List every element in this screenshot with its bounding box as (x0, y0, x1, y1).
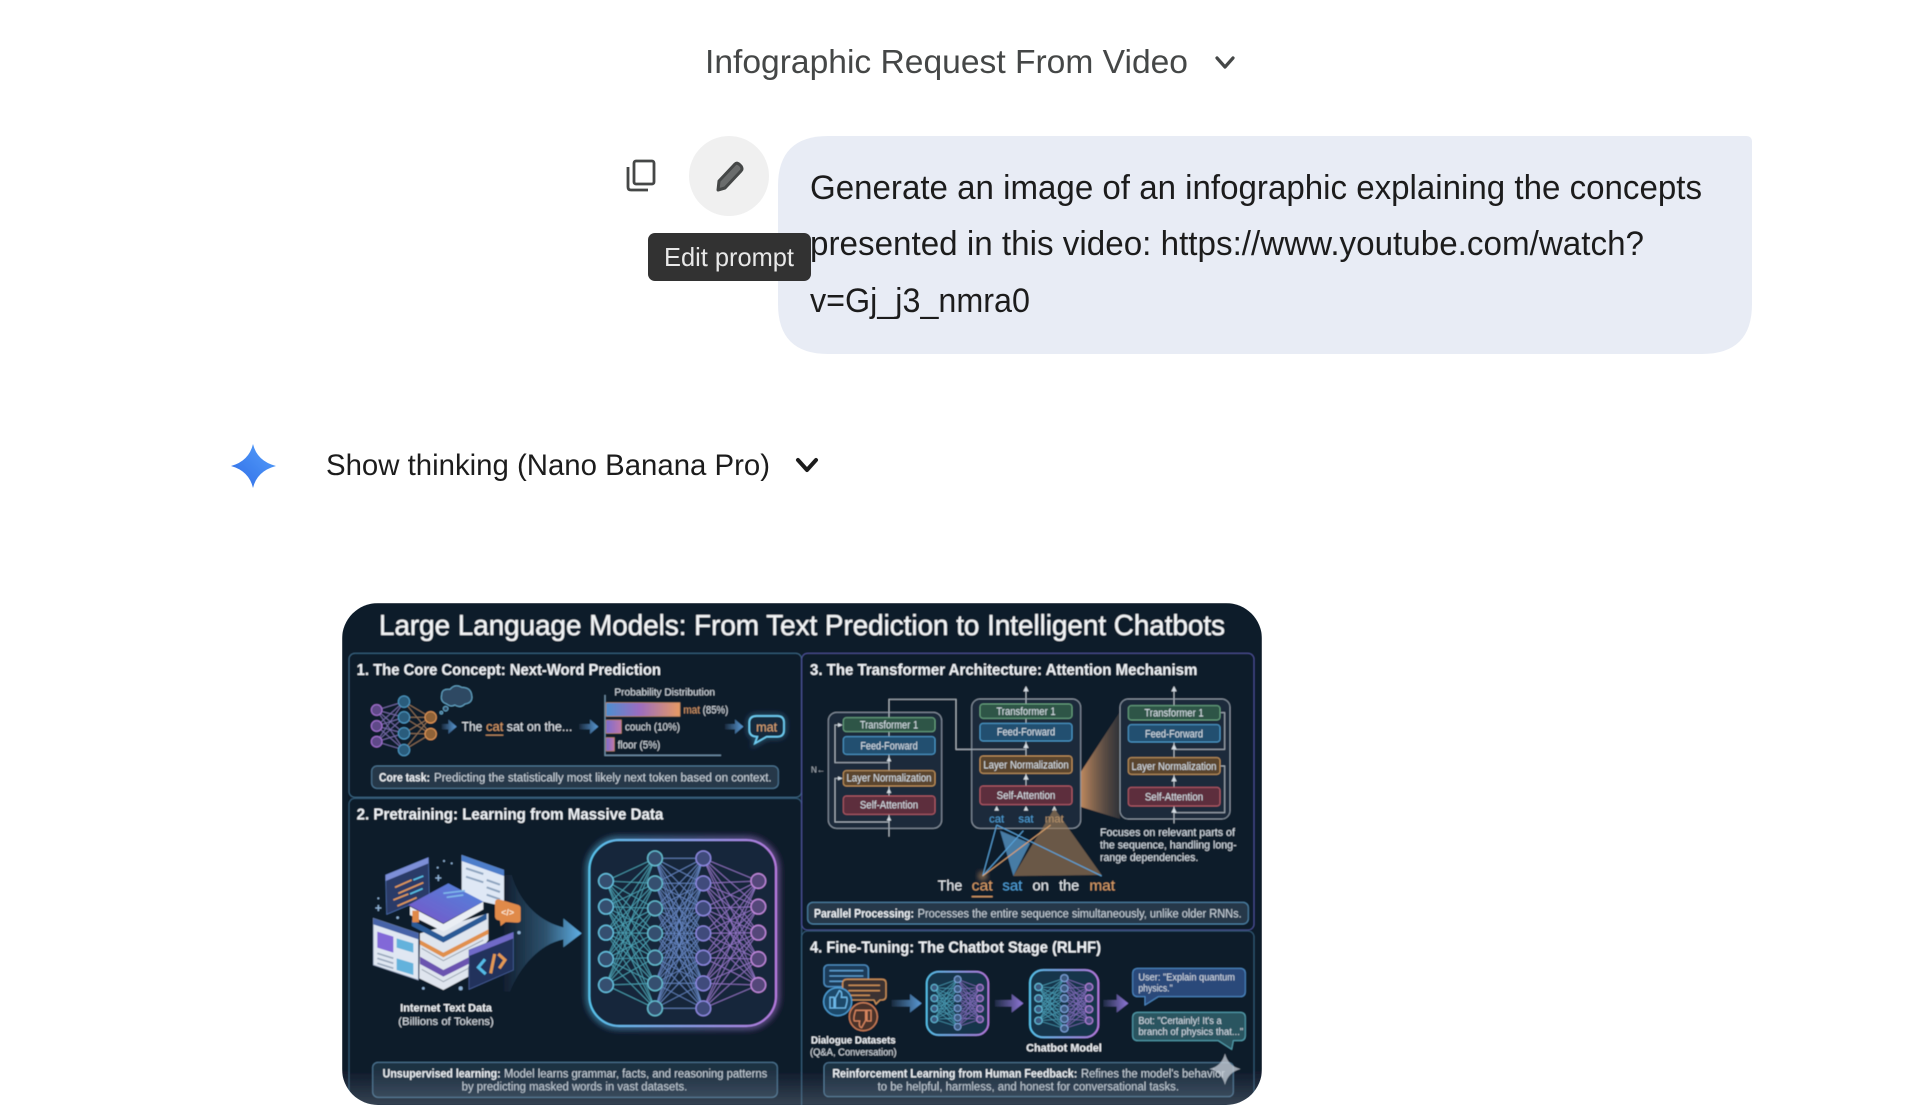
code speech icon: </> (501, 908, 514, 918)
sentence: the cat sat on the mat: The (938, 879, 962, 895)
core task callout: Predicting the statistically most likely next token based on context. (434, 771, 772, 785)
code speech icon (495, 899, 521, 926)
heading 2: 2. Pretraining: Learning from Massive Data (357, 806, 664, 823)
unsupervised learning callout: Model learns grammar, facts, and reasoning patterns (504, 1067, 767, 1081)
reinforcement learning callout: Refines the model's behavior (1081, 1067, 1225, 1081)
transformer block: right: Self-Attention (1145, 791, 1203, 803)
base model (927, 972, 988, 1035)
data label: Internet Text Data (400, 1003, 493, 1015)
panel 1: next-word prediction (349, 653, 802, 797)
code window, lower right (469, 932, 513, 989)
probability chart: floor (5%) (618, 740, 660, 752)
large neural network (589, 840, 776, 1026)
internet data illustration (373, 855, 521, 990)
probability chart: (85%) (703, 704, 728, 716)
show thinking label: Show thinking (Nano Banana Pro) (326, 449, 770, 482)
prompt text (810, 169, 1702, 320)
chat interface (231, 43, 1752, 488)
unsupervised learning callout (373, 1062, 777, 1097)
transformer block: centre (956, 686, 1081, 828)
centre block word labels: sat (1018, 813, 1034, 825)
infographic title: Large Language Models: From Text Prediction to Intelligent Chatbots (379, 610, 1225, 642)
input sentence: cat (486, 719, 504, 734)
heading 3: 3. The Transformer Architecture: Attention Mechanism (810, 662, 1197, 679)
tooltip: edit prompt: Edit prompt (664, 242, 795, 272)
transformer block: left: Layer Normalization (846, 773, 931, 785)
bot chat bubble (1133, 1012, 1245, 1049)
user chat bubble: User: "Explain quantum (1138, 973, 1235, 984)
focus description: Focuses on relevant parts of (1100, 827, 1236, 839)
core task callout (372, 766, 778, 788)
parallel processing callout: Processes the entire sequence simultaneously, unlike older RNNs. (918, 906, 1242, 920)
transformer block: left: Self-Attention (860, 799, 918, 811)
heading 4: 4. Fine-Tuning: The Chatbot Stage (RLHF) (810, 939, 1101, 956)
transformer block: left: Transformer 1 (860, 719, 918, 731)
arrow (892, 994, 922, 1013)
prompt text: Generate an image of an infographic explaining the concepts (810, 169, 1702, 207)
chatbot model label: Chatbot Model (1026, 1043, 1102, 1055)
conversation title: Infographic Request From Video (705, 43, 1188, 80)
sentence: the cat sat on the mat: mat (1089, 879, 1115, 895)
prompt text: presented in this video: https://www.youtube.com/watch? (810, 225, 1644, 263)
unsupervised learning callout: Unsupervised learning: (383, 1067, 501, 1081)
bottom fade overlay (342, 1070, 1262, 1105)
transformer block: centre: Feed-Forward (997, 727, 1055, 739)
transformer block: left (826, 698, 971, 838)
output bubble: mat: mat (756, 720, 778, 734)
probability chart: couch (10%) (625, 722, 680, 734)
icon: gemini star (231, 444, 276, 488)
user chat bubble (1133, 968, 1245, 1005)
input sentence (462, 719, 572, 736)
icon: edit button (689, 136, 769, 216)
input sentence: sat on the... (507, 719, 572, 734)
sentence: the cat sat on the mat: the (1059, 879, 1079, 895)
unsupervised learning callout: by predicting masked words in vast datasets. (462, 1080, 687, 1094)
probability chart (605, 688, 728, 755)
focus description: range dependencies. (1100, 852, 1198, 864)
attention cone (1080, 713, 1121, 820)
icon: title chevron (1217, 58, 1233, 67)
reinforcement learning callout: to be helpful, harmless, and honest for conversational tasks. (878, 1080, 1179, 1094)
book stack (408, 883, 488, 990)
prompt text: v=Gj_j3_nmra0 (810, 282, 1030, 320)
document window, top right (462, 855, 504, 907)
probability chart: mat (683, 704, 700, 716)
panel 3: transformer architecture (802, 653, 1254, 930)
sparkle dots (375, 860, 521, 990)
heading 1: 1. The Core Concept: Next-Word Prediction (357, 662, 661, 679)
core task callout: Core task: (379, 771, 430, 785)
transformer block: right: Layer Normalization (1131, 761, 1216, 773)
reinforcement learning callout (824, 1063, 1233, 1097)
attention connections (978, 808, 1102, 881)
transformer block: right (1120, 686, 1230, 823)
funnel arrow (502, 875, 582, 992)
reinforcement learning callout: Reinforcement Learning from Human Feedback: (832, 1067, 1077, 1081)
sentence: the cat sat on the mat: sat (1002, 879, 1022, 895)
panel 2: pretraining (349, 798, 802, 1119)
sentence: the cat sat on the mat (938, 879, 1115, 897)
bot chat bubble: Bot: "Certainly! It's a (1138, 1016, 1222, 1027)
transformer block: centre: Transformer 1 (996, 706, 1056, 718)
dialogue label: Dialogue Datasets (811, 1035, 896, 1046)
focus description (1100, 827, 1237, 864)
focus description: the sequence, handling long- (1100, 839, 1237, 851)
probability chart: Probability Distribution (614, 688, 715, 699)
input sentence: The (462, 719, 482, 734)
transformer block: right: Transformer 1 (1144, 707, 1204, 719)
centre block word labels: mat (1045, 813, 1065, 825)
watermark sparkle (1209, 1053, 1241, 1085)
centre block word labels (988, 814, 1064, 824)
arrow (995, 994, 1023, 1013)
centre block word labels: cat (989, 813, 1005, 825)
code window, top left (386, 858, 429, 914)
transformer block: left: Feed-Forward (860, 740, 918, 752)
sentence: the cat sat on the mat: cat (972, 879, 993, 895)
panel 4: fine-tuning (802, 931, 1254, 1119)
infographic image (342, 603, 1262, 1119)
icon: thinking chevron (798, 460, 816, 470)
parallel processing callout: Parallel Processing: (814, 906, 914, 920)
N times label: N← (811, 765, 825, 775)
tooltip: edit prompt (648, 233, 811, 281)
data label (398, 1003, 494, 1028)
parallel processing callout (808, 902, 1248, 924)
arrow (579, 719, 598, 734)
data label: (Billions of Tokens) (398, 1016, 494, 1028)
user chat bubble: physics." (1138, 984, 1173, 995)
bot chat bubble: branch of physics that..." (1138, 1027, 1244, 1038)
icon: copy (628, 161, 654, 190)
transformer block: right: Feed-Forward (1145, 728, 1203, 740)
dialogue label: (Q&A, Conversation) (810, 1047, 897, 1058)
document window, lower left (373, 918, 418, 980)
prompt bubble (778, 136, 1752, 354)
transformer block: centre: Layer Normalization (983, 759, 1069, 771)
arrow (1103, 994, 1128, 1013)
arrow (725, 719, 743, 734)
neural network icon (371, 696, 436, 756)
output bubble: mat (749, 716, 784, 743)
chatbot model (1030, 970, 1098, 1037)
thought cloud (440, 686, 472, 714)
sentence: the cat sat on the mat: on (1032, 879, 1049, 895)
transformer block: centre: Self-Attention (997, 790, 1055, 802)
dialogue icons (824, 965, 886, 1031)
arrow (442, 719, 457, 734)
dialogue label (810, 1035, 897, 1058)
